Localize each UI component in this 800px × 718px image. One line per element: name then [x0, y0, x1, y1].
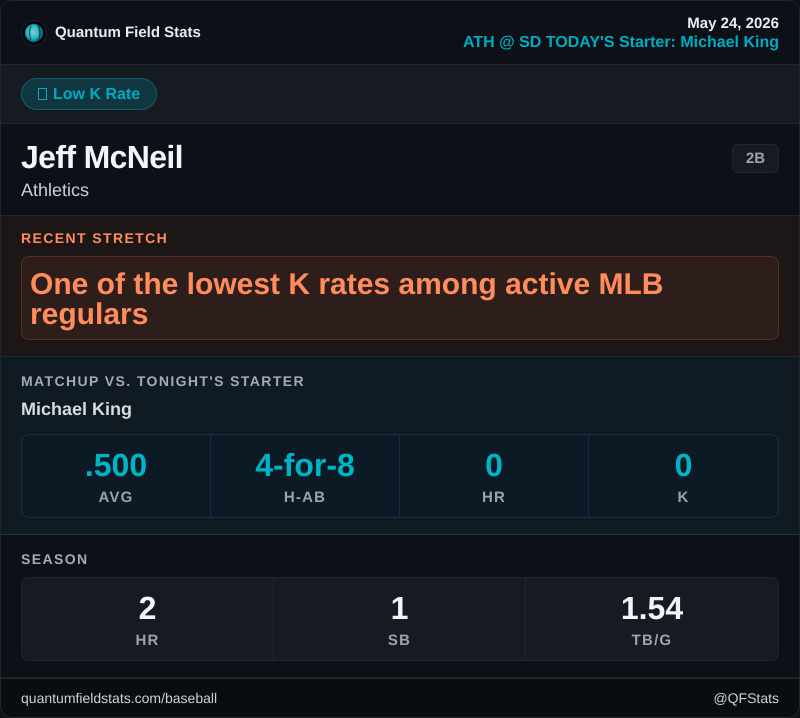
stat: SB: SB — [388, 632, 411, 649]
stat: H-AB: H-AB — [284, 489, 326, 506]
stat: AVG — [22, 435, 211, 517]
stat: H-AB: 4-for-8 — [255, 447, 355, 483]
stat: SB — [274, 578, 526, 660]
header — [1, 1, 799, 65]
stat: HR — [22, 578, 274, 660]
brand name: Quantum Field Stats — [55, 24, 201, 41]
player name: Jeff McNeil — [21, 139, 183, 175]
stat: HR: 2 — [139, 590, 156, 626]
heading: SEASON — [21, 551, 89, 567]
stat: TB/G: 1.54 — [621, 590, 683, 626]
panel: matchup — [1, 357, 799, 535]
stat: H-AB — [211, 435, 400, 517]
badge: Low K Rate: Low K Rate — [53, 86, 140, 103]
stat: K: K — [677, 489, 690, 506]
heading: MATCHUP VS. TONIGHT'S STARTER — [21, 373, 305, 389]
stat: K — [675, 447, 692, 506]
panel: recent stretch — [1, 216, 799, 357]
badge: Low K Rate — [21, 78, 157, 110]
stat: AVG: AVG — [98, 489, 134, 506]
position badge: 2B — [746, 150, 765, 167]
stat: HR: 0 — [485, 447, 503, 483]
stat: HR: HR — [135, 632, 160, 649]
social handle: @QFStats — [713, 690, 779, 706]
stat: TB/G — [621, 590, 683, 649]
date: May 24, 2026 — [687, 15, 779, 32]
badge bar — [1, 65, 799, 124]
player section — [1, 125, 799, 216]
stat: AVG: .500 — [85, 447, 147, 483]
stat grid: matchup — [21, 434, 779, 518]
site url: quantumfieldstats.com/baseball — [21, 690, 217, 706]
footer — [1, 677, 799, 717]
position badge — [732, 144, 779, 173]
callout: One of the lowest K rates among active MLB regulars — [30, 268, 663, 331]
callout — [21, 256, 779, 340]
stat: TB/G: TB/G — [632, 632, 672, 649]
stat: HR — [400, 435, 589, 517]
stat: SB: 1 — [391, 590, 408, 626]
team: Athletics — [21, 180, 89, 200]
heading: RECENT STRETCH — [21, 230, 168, 246]
stat: K: 0 — [675, 447, 692, 483]
stat grid: season — [21, 577, 779, 661]
game and starter: ATH @ SD TODAY'S Starter: Michael King — [463, 34, 779, 51]
panel: season — [1, 535, 799, 678]
icon: logo orb — [21, 20, 47, 46]
stat: HR: HR — [482, 489, 506, 506]
pitcher name: Michael King — [21, 399, 132, 419]
